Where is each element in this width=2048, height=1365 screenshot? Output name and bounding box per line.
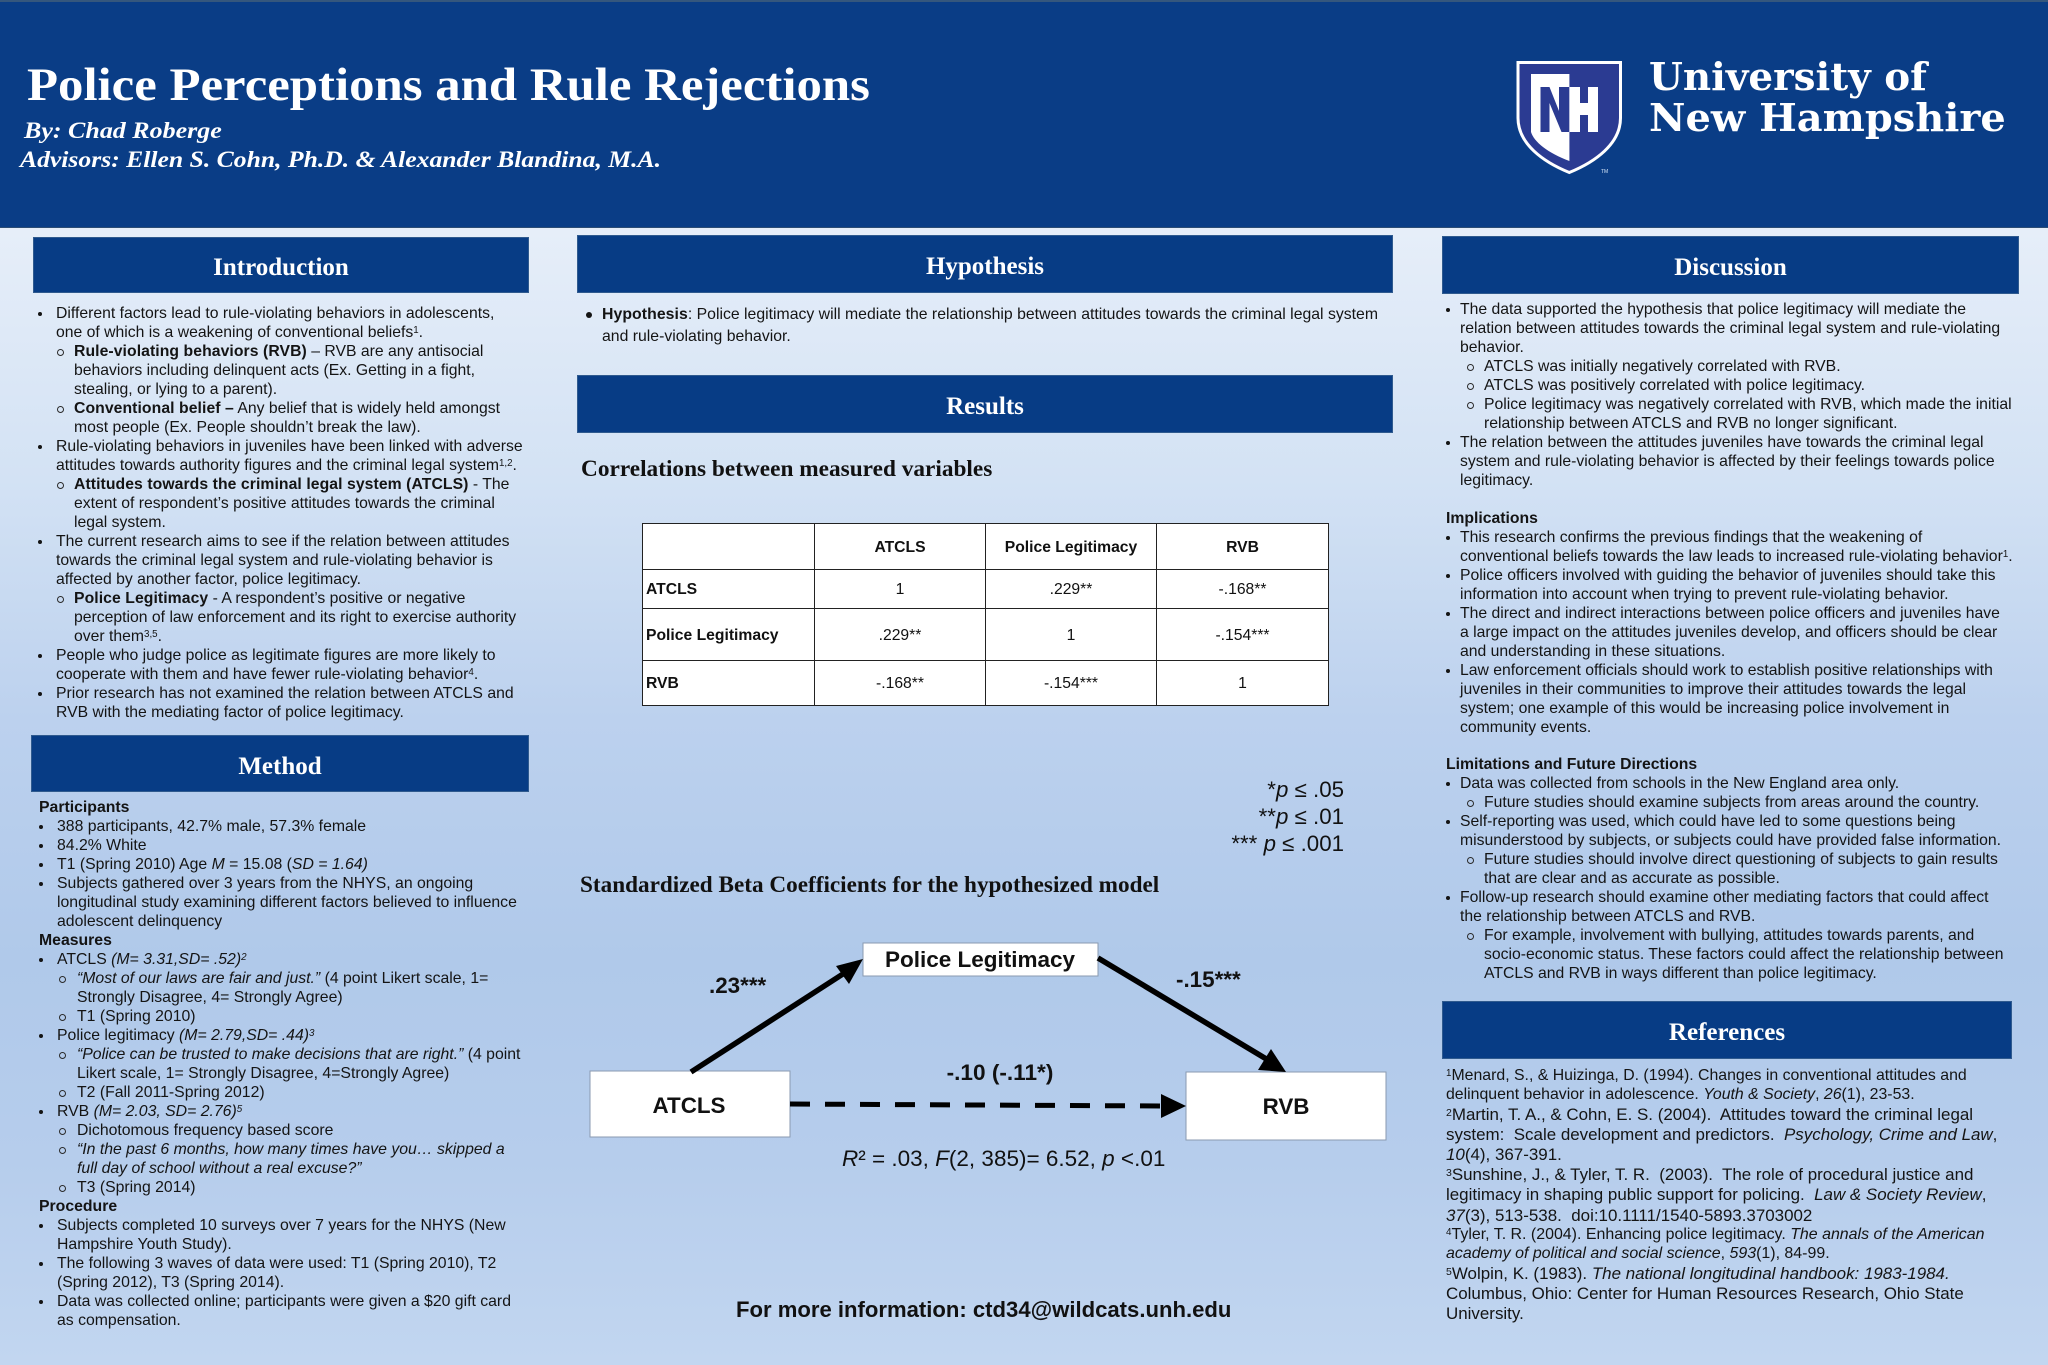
table: correlations between measured variables: 1 [1067,626,1075,644]
text: discussion summary and implications: and understanding in these situations. [1460,643,1725,660]
text: reference list: system: Scale development and predictors. Psychology, Crime and Law, [1446,1125,1997,1144]
text: discussion summary and implications: information into account when trying to prevent rule-violating behavior. [1460,586,1949,603]
text: method details: “In the past 6 months, how many times have you… skipped a [77,1141,505,1158]
text: introduction bullets: towards the criminal legal system and rule-violating behavior is [56,552,493,569]
text: method details: Procedure [39,1198,117,1215]
text: method details: Participants [39,799,129,816]
text: method details: longitudinal study examining different factors believed to influence [57,894,517,911]
text: limitations and future directions: the relationship between ATCLS and RVB. [1460,908,1755,925]
table: correlations between measured variables: 1 [1238,675,1247,692]
text: method details: Subjects gathered over 3 years from the NHYS, an ongoing [57,875,473,892]
text: introduction bullets: Rule-violating behaviors in juveniles have been linked with adverse [56,438,523,455]
heading: discussion [1442,236,2019,294]
label: direct path coefficient: -.10 (-.11*) [947,1060,1053,1085]
text: reference list: 2Martin, T. A., & Cohn, E. S. (2004). Attitudes toward the criminal legal [1446,1105,1973,1124]
text: introduction bullets: extent of respondent’s positive attitudes towards the criminal [74,495,495,512]
text: limitations and future directions: Self-reporting was used, which could have led to some questions being [1460,813,1956,830]
text: limitations and future directions: Data was collected from schools in the New England area only. [1460,775,1899,792]
text: reference list: 10(4), 367-391. [1446,1145,1562,1164]
text: discussion summary and implications: system; one example of this would be increasing police involvement in [1460,700,1949,717]
advisors: Advisors: Ellen S. Cohn, Ph.D. & Alexander Blandina, M.A. [20,147,661,172]
text: reference list: 3Sunshine, J., & Tyler, T. R. (2003). The role of procedural justice and [1446,1165,1973,1184]
text: reference list: 1Menard, S., & Huizinga, D. (1994). Changes in conventional attitudes and [1446,1067,1967,1084]
panel: discussion [1442,236,2019,982]
panel: introduction [33,237,529,721]
text: introduction bullets: Different factors lead to rule-violating behaviors in adolescents, [56,305,494,322]
text: method details [39,799,520,1329]
text: method details: Dichotomous frequency based score [77,1122,333,1139]
panel: method [31,735,529,1329]
heading: references [1442,1001,2012,1059]
text: introduction bullets [38,305,523,721]
table: correlations between measured variables: RVB [1226,538,1259,556]
text: discussion summary and implications [1446,301,2013,736]
text: discussion summary and implications: Law enforcement officials should work to establish positive relationships with [1460,662,1993,679]
arrow: dashed ATCLS to RVB [790,1094,1186,1118]
text: reference list: 5Wolpin, K. (1983). The national longitudinal handbook: 1983-1984. [1446,1264,1950,1283]
text: discussion summary and implications: relationship between ATCLS and RVB no longer significant. [1484,415,1898,432]
icon: UNH shield logo [1516,61,1622,175]
text: discussion summary and implications: behavior. [1460,339,1524,356]
text: method details: full day of school without a real excuse?” [77,1160,362,1177]
text: introduction bullets: most people (Ex. People shouldn’t break the law). [74,419,421,436]
table: correlations between measured variables: RVB [646,675,679,692]
contact line: For more information: ctd34@wildcats.unh.edu [736,1297,1231,1322]
heading: method: Method [238,753,322,780]
table: correlations between measured variables: ATCLS [874,538,926,556]
arrow: ATCLS to Police Legitimacy [691,959,863,1072]
text: discussion summary and implications: This research confirms the previous findings that the weakening of [1460,529,1922,546]
text: discussion summary and implications: community events. [1460,719,1591,736]
text: limitations and future directions: For example, involvement with bullying, attitudes towards parents, and [1484,927,1974,944]
text: discussion summary and implications: The relation between the attitudes juveniles have towards the criminal legal [1460,434,1984,451]
title: Police Perceptions and Rule Rejections [27,58,870,110]
text: introduction bullets: People who judge police as legitimate figures are more likely to [56,647,496,664]
text: discussion summary and implications: Police legitimacy was negatively correlated with RVB, which made the initial [1484,396,2012,413]
box: ATCLS: ATCLS [653,1093,726,1118]
text: reference list [1446,1067,1997,1323]
table: correlations between measured variables: Police Legitimacy [1005,538,1137,556]
text: limitations and future directions: socio-economic status. These factors could affect the relationship between [1484,946,2003,963]
text: introduction bullets: perception of law enforcement and its right to exercise authority [74,609,516,626]
text: method details: T1 (Spring 2010) Age M = 15.08 (SD = 1.64) [57,856,368,873]
text: discussion summary and implications: legitimacy. [1460,472,1533,489]
text: reference list: University. [1446,1304,1524,1323]
text: limitations and future directions: misunderstood by subjects, or subjects could have provided false information. [1460,832,2001,849]
panel: results [577,375,1393,1171]
heading: introduction: Introduction [213,254,349,281]
label: model statistics: R² = .03, F(2, 385)= 6.52, p <.01 [842,1146,1165,1171]
text: discussion summary and implications: conventional beliefs towards the law leads to increased rule-violating behavior1. [1460,548,2013,565]
text: limitations and future directions: Follow-up research should examine other mediating factors that could affect [1460,889,1988,906]
box: Police Legitimacy: Police Legitimacy [885,947,1076,972]
text: method details: Subjects completed 10 surveys over 7 years for the NHYS (New [57,1217,506,1234]
text: method details: T3 (Spring 2014) [77,1179,196,1196]
table: correlations between measured variables: .229** [879,626,921,644]
text: introduction bullets: behaviors including delinquent acts (Ex. Getting in a fight, [74,362,475,379]
table: correlations between measured variables: Police Legitimacy [646,626,779,644]
table: correlations between measured variables [642,523,1329,706]
text: discussion summary and implications: relation between attitudes towards the criminal legal system and rule-violating [1460,320,2000,337]
text: discussion summary and implications: The data supported the hypothesis that police legitimacy will mediate the [1460,301,1966,318]
text: discussion summary and implications: Implications [1446,510,1538,527]
text: introduction bullets: Conventional belief – Any belief that is widely held amongst [74,400,500,417]
text: hypothesis statement [586,306,1378,345]
subheading: correlations: Correlations between measured variables [581,456,992,482]
box: Police Legitimacy [863,943,1098,976]
text: discussion summary and implications: juveniles in their communities to improve their attitudes towards the legal [1460,681,1966,698]
text: discussion summary and implications: The direct and indirect interactions between police officers and juveniles have [1460,605,2000,622]
label: path b coefficient: -.15*** [1176,967,1241,992]
table: correlations between measured variables: ATCLS [646,581,697,598]
text: hypothesis statement: and rule-violating behavior. [602,328,791,345]
legend: significance levels: *** p ≤ .001 [1231,831,1344,856]
text: introduction bullets: Prior research has not examined the relation between ATCLS and [56,685,514,702]
text: method details: Measures [39,932,112,949]
text: reference list: academy of political and social science, 593(1), 84-99. [1446,1245,1830,1262]
text: introduction bullets: The current research aims to see if the relation between attitudes [56,533,510,550]
text: introduction bullets: legal system. [74,514,166,531]
heading: results: Results [946,393,1024,420]
heading: introduction [33,237,529,293]
text: introduction bullets: RVB with the mediating factor of police legitimacy. [56,704,404,721]
text: discussion summary and implications: a large impact on the attitudes juveniles develop, and officers should be clear [1460,624,1997,641]
text: method details: Data was collected online; participants were given a $20 gift card [57,1293,511,1310]
text: discussion summary and implications: ATCLS was initially negatively correlated with RVB. [1484,358,1841,375]
heading: references: References [1669,1019,1785,1046]
university name line 2: New Hampshire [1649,95,2006,140]
text: method details: “Most of our laws are fair and just.” (4 point Likert scale, 1= [77,970,488,987]
header banner [0,0,2048,228]
panel: references [1442,1001,2012,1323]
text: discussion summary and implications: system and rule-violating behavior is affected by their feelings towards police [1460,453,1995,470]
text: discussion summary and implications: ATCLS was positively correlated with police legitimacy. [1484,377,1865,394]
text: method details: Likert scale, 1= Strongly Disagree, 4=Strongly Agree) [77,1065,449,1082]
text: method details: adolescent delinquency [57,913,222,930]
legend: significance levels [1231,777,1344,856]
text: method details: T1 (Spring 2010) [77,1008,196,1025]
text: method details: Strongly Disagree, 4= Strongly Agree) [77,989,343,1006]
table: correlations between measured variables: -.154*** [1044,675,1098,692]
table: correlations between measured variables: -.168** [876,675,924,692]
arrow: Police Legitimacy to RVB [1098,958,1286,1072]
text: introduction bullets: Police Legitimacy - A respondent’s positive or negative [74,590,465,607]
chart: mediation model diagram [590,942,1386,1171]
university name line 1: University of [1649,54,1927,99]
text: method details: 84.2% White [57,837,147,854]
box: RVB: RVB [1263,1094,1309,1119]
text: introduction bullets: Attitudes towards the criminal legal system (ATCLS) - The [74,476,509,493]
text: limitations and future directions: Future studies should examine subjects from areas around the country. [1484,794,1979,811]
text: method details: as compensation. [57,1312,181,1329]
text: method details: T2 (Fall 2011-Spring 2012) [77,1084,265,1101]
text: method details: ATCLS (M= 3.31,SD= .52)2 [57,951,247,968]
table: correlations between measured variables: -.154*** [1215,626,1270,644]
icon: UNH shield logo: TM [1601,169,1608,175]
text: method details: “Police can be trusted to make decisions that are right.” (4 point [77,1046,520,1063]
text: limitations and future directions: Future studies should involve direct questioning of subjects to gain results [1484,851,1998,868]
text: reference list: 37(3), 513-538. doi:10.1111/1540-5893.3703002 [1446,1206,1812,1225]
text: discussion summary and implications: Police officers involved with guiding the behavior of juveniles should take this [1460,567,1996,584]
text: method details: RVB (M= 2.03, SD= 2.76)5 [57,1103,242,1120]
table: correlations between measured variables: 1 [896,581,904,598]
text: method details: 388 participants, 42.7% male, 57.3% female [57,818,366,835]
legend: significance levels: *p ≤ .05 [1267,777,1344,802]
table: correlations between measured variables: -.168** [1219,581,1266,598]
box: RVB [1186,1072,1386,1140]
text: reference list: 4Tyler, T. R. (2004). Enhancing police legitimacy. The annals of the American [1446,1226,1984,1243]
box: ATCLS [590,1071,790,1137]
text: reference list: delinquent behavior in adolescence. Youth & Society, 26(1), 23-53. [1446,1086,1915,1103]
text: introduction bullets: affected by another factor, police legitimacy. [56,571,361,588]
table: correlations between measured variables: .229** [1050,581,1092,598]
heading: hypothesis: Hypothesis [926,253,1044,280]
text: reference list: legitimacy in shaping public support for policing. Law & Society Review, [1446,1185,1986,1204]
text: introduction bullets: stealing, or lying to a parent). [74,381,277,398]
subheading: standardized beta coefficients: Standardized Beta Coefficients for the hypothesized model [580,872,1159,898]
text: method details: Police legitimacy (M= 2.79,SD= .44)3 [57,1027,314,1044]
legend: significance levels: **p ≤ .01 [1259,804,1344,829]
heading: method [31,735,529,792]
label: path a coefficient: .23*** [709,973,767,998]
text: introduction bullets: cooperate with them and have fewer rule-violating behavior4. [56,666,478,683]
text: limitations and future directions: that are clear and as accurate as possible. [1484,870,1780,887]
panel: hypothesis [577,235,1393,345]
text: limitations and future directions: Limitations and Future Directions [1446,756,1697,773]
heading: discussion: Discussion [1674,254,1787,281]
text: method details: Hampshire Youth Study). [57,1236,232,1253]
heading: hypothesis [577,235,1393,293]
text: introduction bullets: one of which is a weakening of conventional beliefs1. [56,324,423,341]
author: By: Chad Roberge [24,118,222,143]
text: hypothesis statement: Hypothesis: Police legitimacy will mediate the relationship between attitudes towards the criminal legal system [602,306,1378,323]
text: method details: The following 3 waves of data were used: T1 (Spring 2010), T2 [57,1255,496,1272]
text: introduction bullets: Rule-violating behaviors (RVB) – RVB are any antisocial [74,343,483,360]
text: introduction bullets: over them3,5. [74,628,162,645]
text: limitations and future directions: ATCLS and RVB in ways different than police legitimacy. [1484,965,1877,982]
text: reference list: Columbus, Ohio: Center for Human Resources Research, Ohio State [1446,1284,1964,1303]
text: method details: (Spring 2012), T3 (Spring 2014). [57,1274,284,1291]
text: introduction bullets: attitudes towards authority figures and the criminal legal system1,2. [56,457,517,474]
heading: results [577,375,1393,433]
text: limitations and future directions [1446,756,2003,982]
